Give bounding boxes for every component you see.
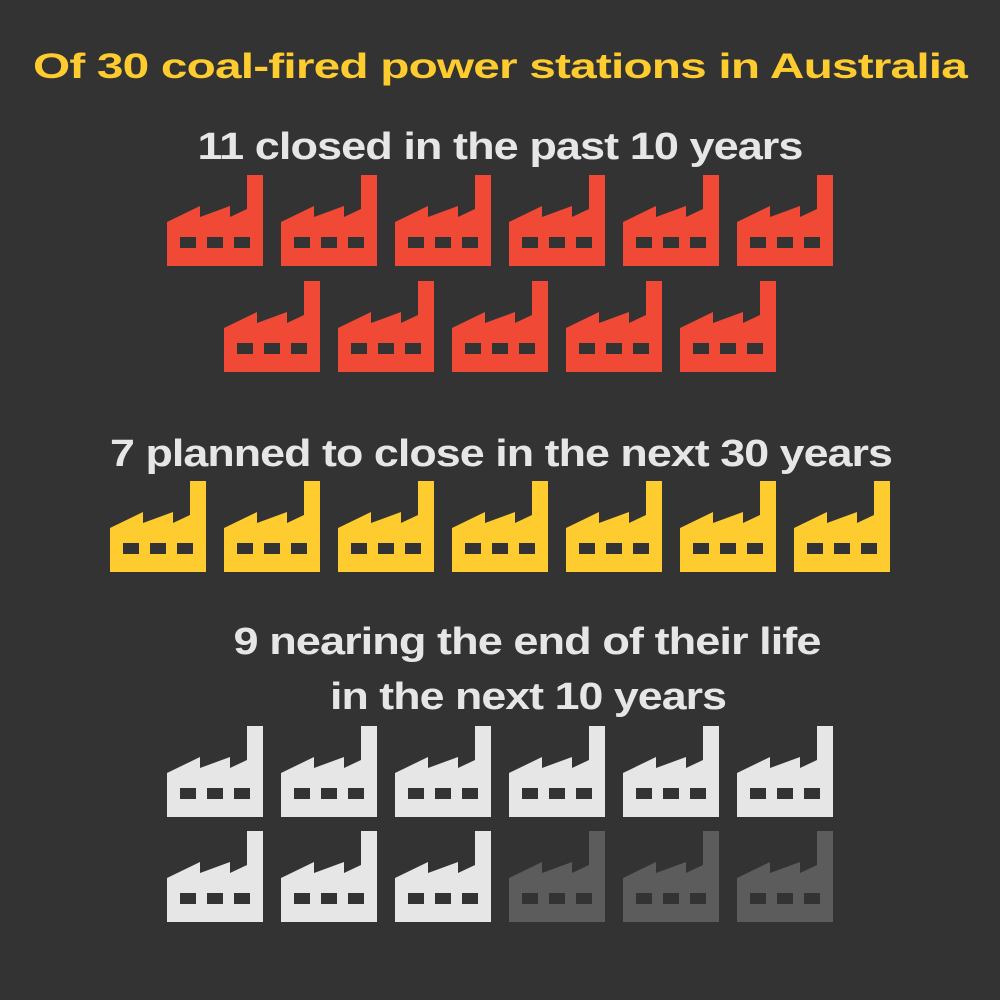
icons: 11 closed factories (167, 175, 833, 372)
heading: nearing end (234, 621, 820, 718)
heading: nearing end: 9 nearing the end of their life (234, 621, 820, 663)
heading: planned: 7 planned to close in the next 30 years (110, 433, 892, 475)
title: Of 30 coal-fired power stations in Australia (33, 47, 969, 86)
icons: 7 planned factories (110, 481, 890, 572)
icons: 9 nearing end + 3 remaining (167, 726, 833, 922)
heading: closed: 11 closed in the past 10 years (198, 126, 802, 168)
heading: nearing end: in the next 10 years (330, 676, 726, 718)
